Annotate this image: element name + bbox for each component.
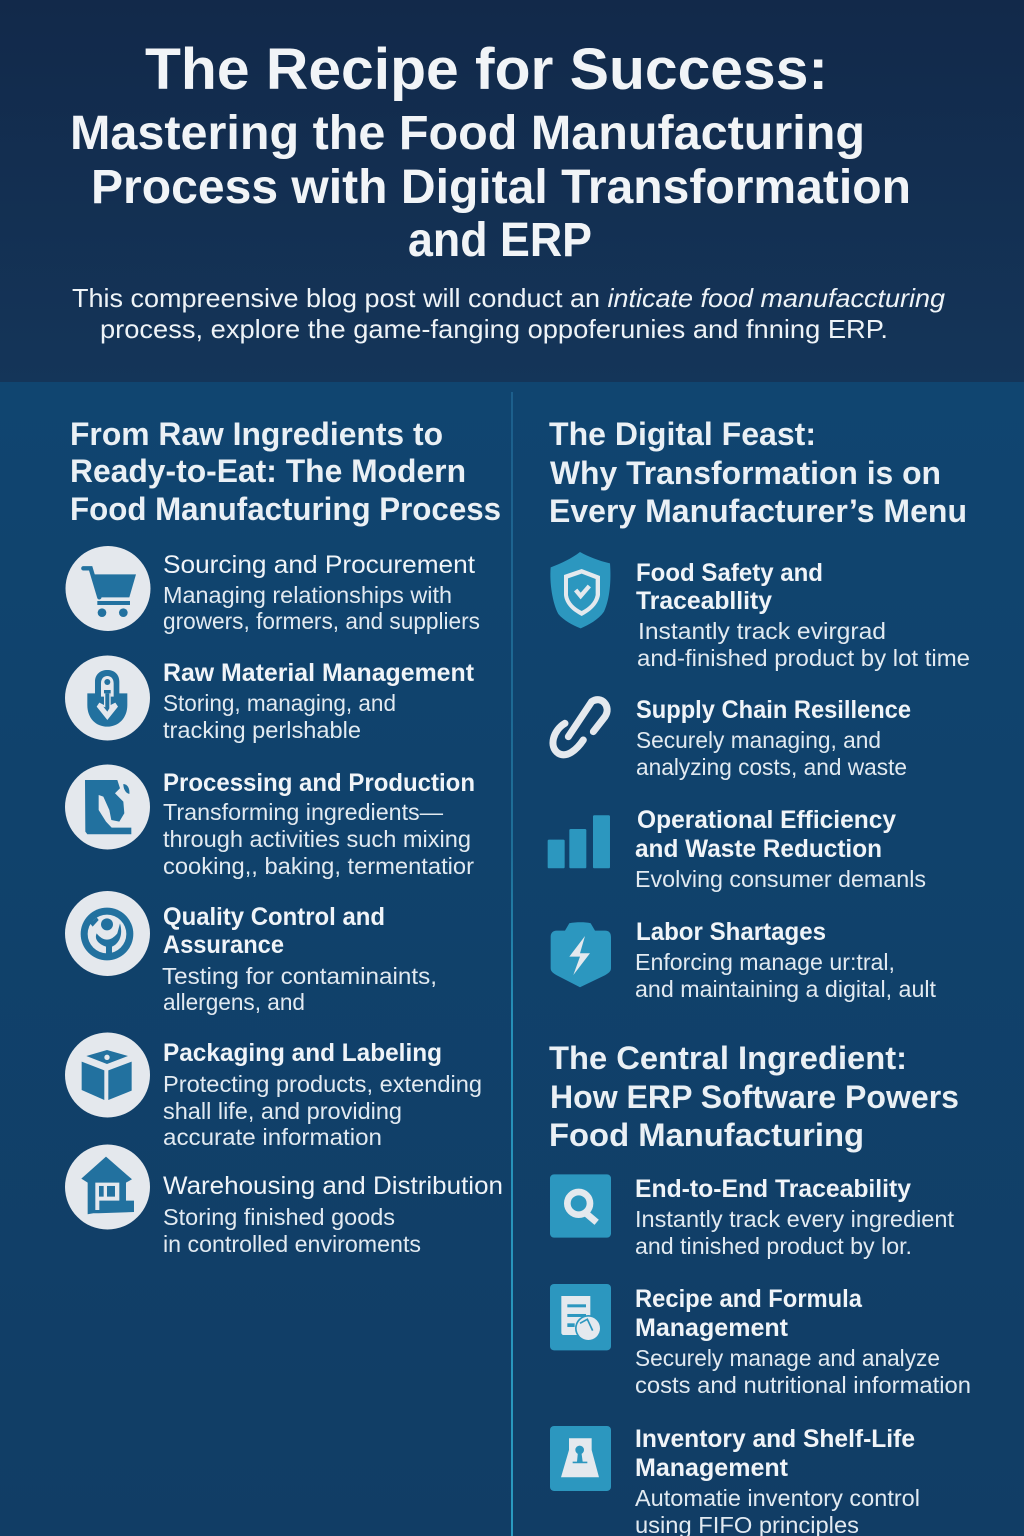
item: supply chain: Supply Chain Resillence <box>636 696 911 724</box>
icon: labor bolt badge <box>551 922 611 987</box>
item: supply chain: analyzing costs, and waste <box>636 754 907 780</box>
heading: process: Food Manufacturing Process <box>70 491 501 527</box>
item: quality <box>162 903 437 1015</box>
icon: shopping cart <box>66 546 150 631</box>
icon: magnifier <box>550 1174 611 1238</box>
item: operational efficiency: Operational Efficiency <box>637 806 896 834</box>
icon: raw material lock <box>65 656 150 740</box>
item: warehousing: Storing finished goods <box>163 1204 395 1230</box>
item: recipe: Securely manage and analyze <box>635 1345 940 1371</box>
heading: digital feast: Why Transformation is on <box>550 455 941 491</box>
item: inventory: Automatie inventory control <box>635 1485 920 1511</box>
heading: central ingredient: The Central Ingredient: <box>549 1040 907 1076</box>
header panel <box>0 0 1024 382</box>
item: processing: Processing and Production <box>163 769 475 797</box>
item: sourcing: growers, formers, and suppliers <box>163 608 480 634</box>
title <box>70 37 911 267</box>
item: quality: Assurance <box>163 931 284 959</box>
item: labor: and maintaining a digital, ault <box>635 976 937 1002</box>
item: sourcing: Managing relationships with <box>163 582 452 608</box>
icon: chain link <box>553 700 607 755</box>
icon: quality control <box>65 891 150 976</box>
item: packaging: shall life, and providing <box>163 1098 402 1124</box>
item: traceability <box>635 1175 955 1259</box>
item: traceability: and tinished product by lor. <box>635 1233 912 1259</box>
item: operational efficiency <box>635 806 926 892</box>
heading: central ingredient <box>549 1040 959 1153</box>
item: warehousing: in controlled enviroments <box>163 1231 421 1257</box>
item: labor: Labor Shartages <box>636 918 826 946</box>
item: packaging: accurate information <box>163 1124 382 1150</box>
item: food safety: Traceabllity <box>636 587 772 615</box>
heading: central ingredient: Food Manufacturing <box>549 1117 864 1153</box>
item: food safety: Food Safety and <box>636 559 823 587</box>
icon: shield <box>550 552 610 628</box>
item: packaging <box>163 1039 482 1150</box>
heading: digital feast <box>549 416 967 529</box>
item: inventory <box>635 1425 920 1536</box>
item: quality: Testing for contaminaints, <box>162 963 437 989</box>
icon: inventory flask <box>550 1426 611 1491</box>
item: inventory: Management <box>635 1454 789 1482</box>
intro text <box>72 283 946 344</box>
item: warehousing <box>163 1172 503 1257</box>
icon: package box <box>65 1032 150 1118</box>
column divider <box>511 392 513 1536</box>
item: recipe: Management <box>635 1314 789 1342</box>
item: food safety <box>636 559 970 671</box>
icon: warehouse <box>65 1144 150 1230</box>
title: and ERP <box>408 214 592 267</box>
item: sourcing <box>163 551 480 634</box>
item: sourcing: Sourcing and Procurement <box>163 551 475 579</box>
heading: process: From Raw Ingredients to <box>70 416 443 452</box>
item: labor: Enforcing manage ur:tral, <box>635 949 895 975</box>
heading: process: Ready-to-Eat: The Modern <box>70 453 466 489</box>
item: processing: Transforming ingredients— <box>163 799 443 825</box>
item: processing <box>163 769 475 879</box>
intro text: This compreensive blog post will conduct an inticate food manufaccturing <box>72 283 946 313</box>
item: operational efficiency: Evolving consumer demanls <box>635 866 926 892</box>
intro text: process, explore the game-fanging oppoferunies and fnning ERP. <box>100 314 888 344</box>
item: supply chain: Securely managing, and <box>636 727 881 753</box>
heading: digital feast: Every Manufacturer’s Menu <box>549 493 967 529</box>
panel: food manufacturing process <box>65 416 503 1257</box>
icon: processing mixer <box>65 764 150 850</box>
heading: process <box>70 416 501 527</box>
body background <box>0 382 1024 1536</box>
item: raw material: Raw Material Management <box>163 659 475 687</box>
heading: digital feast: The Digital Feast: <box>549 416 816 452</box>
item: recipe: costs and nutritional information <box>635 1372 971 1398</box>
item: inventory: Inventory and Shelf-Life <box>635 1425 915 1453</box>
item: processing: through activities such mixing <box>163 826 471 852</box>
item: raw material: Storing, managing, and <box>163 690 396 716</box>
heading: central ingredient: How ERP Software Powers <box>550 1079 959 1115</box>
item: packaging: Protecting products, extending <box>163 1071 482 1097</box>
item: traceability: Instantly track every ingredient <box>635 1206 955 1232</box>
item: supply chain <box>636 696 911 780</box>
item: raw material: tracking perlshable <box>163 717 361 743</box>
item: quality: Quality Control and <box>163 903 385 931</box>
title: Process with Digital Transformation <box>91 161 911 214</box>
item: food safety: Instantly track evirgrad <box>638 618 886 644</box>
icon: recipe document <box>550 1284 611 1350</box>
item: raw material <box>163 659 475 743</box>
item: labor <box>635 918 937 1002</box>
title: The Recipe for Success: <box>145 37 828 102</box>
panel: central ingredient ERP <box>549 1040 971 1536</box>
panel: digital feast <box>548 416 970 1002</box>
item: warehousing: Warehousing and Distribution <box>163 1172 503 1200</box>
item: packaging: Packaging and Labeling <box>163 1039 442 1067</box>
item: quality: allergens, and <box>163 989 305 1015</box>
item: operational efficiency: and Waste Reduction <box>635 835 882 863</box>
item: recipe <box>635 1285 971 1398</box>
item: recipe: Recipe and Formula <box>635 1285 863 1313</box>
title: Mastering the Food Manufacturing <box>70 107 865 160</box>
item: traceability: End-to-End Traceability <box>635 1175 911 1203</box>
item: food safety: and-finished product by lot time <box>637 645 970 671</box>
icon: bar chart <box>548 815 610 868</box>
item: processing: cooking,, baking, termentatior <box>163 853 474 879</box>
